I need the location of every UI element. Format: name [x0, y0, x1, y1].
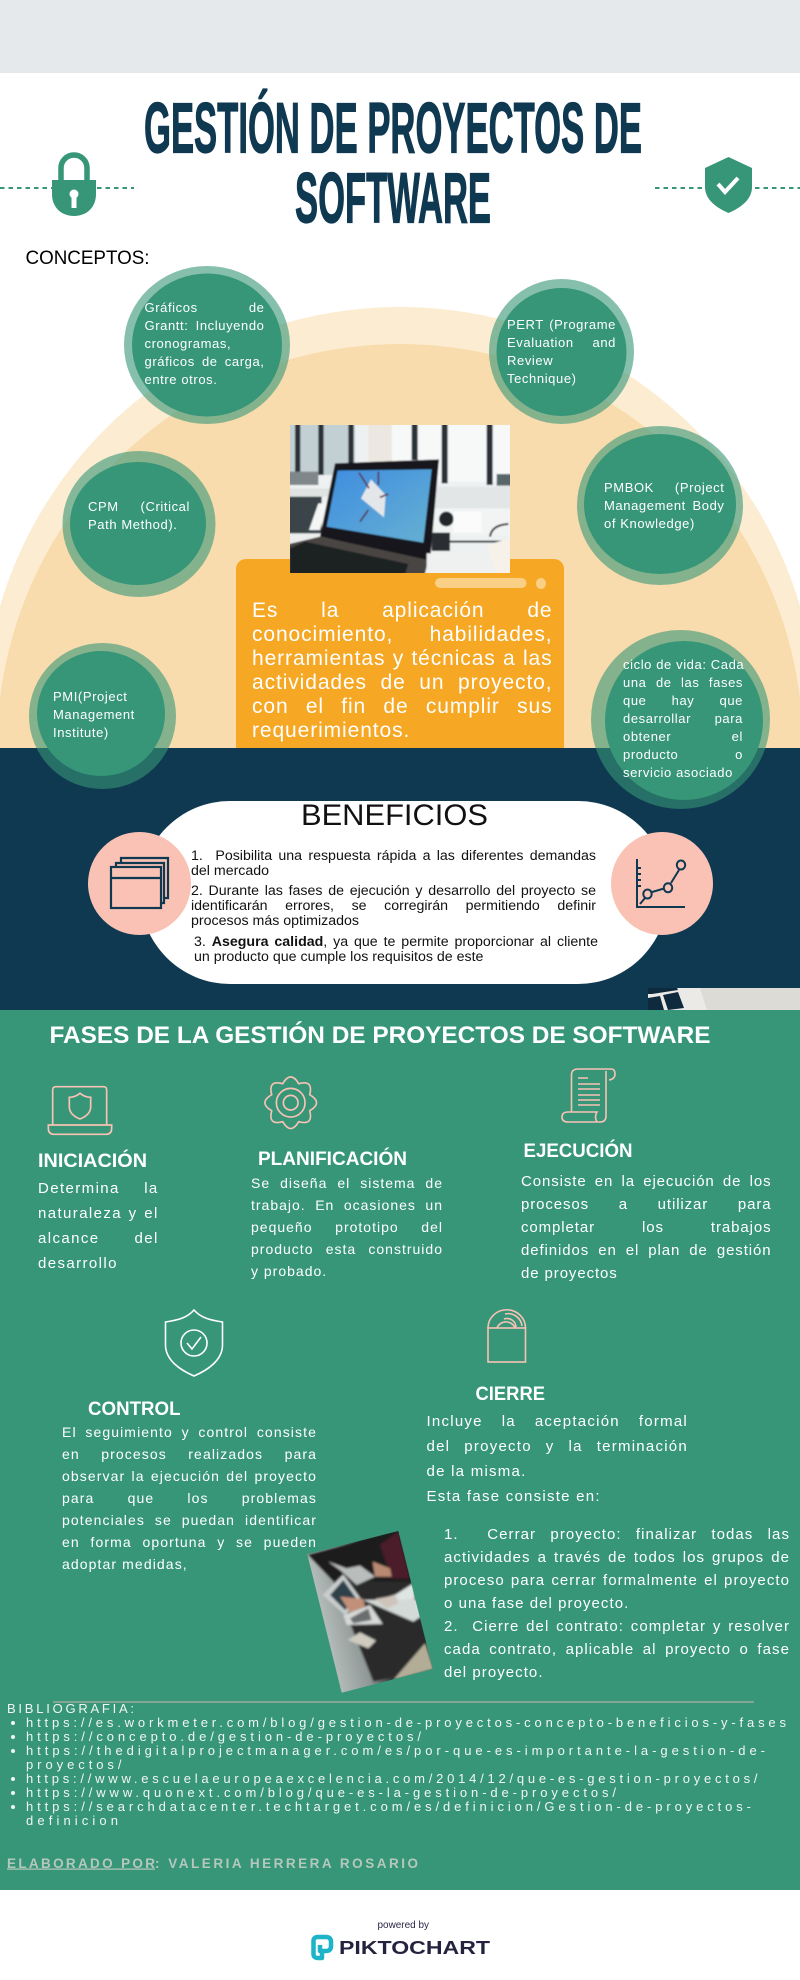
text: ciclo de vida: producto o — [623, 747, 743, 762]
text: bibliografia: https://www.escuelaeuropeaexcelencia.com/2014/12/que-es-gestion-proyectos/ — [26, 1771, 758, 1786]
heading: control: CONTROL — [88, 1399, 181, 1420]
text: cierre intro — [426, 1412, 688, 1504]
text: cierre list: actividades a través de todos los grupos de — [444, 1548, 790, 1566]
text: beneficio 2: procesos más optimizados — [191, 912, 359, 928]
text: ejecucion: de proyectos — [521, 1264, 618, 1282]
text: beneficio 2 — [191, 882, 596, 928]
text: beneficio 2: 2. Durante las fases de ejecución y desarrollo del proyecto se — [191, 882, 596, 898]
text: cierre intro: del proyecto y la terminación — [426, 1438, 688, 1454]
text: ciclo de vida: servicio asociado — [623, 765, 733, 780]
text: beneficio 1: del mercado — [191, 862, 269, 878]
text: elaborado por — [7, 1856, 418, 1871]
text: CPM: Path Method). — [88, 517, 177, 532]
text: definition — [252, 598, 552, 742]
divider — [53, 1701, 754, 1703]
text: planificacion: pequeño prototipo del — [251, 1219, 443, 1235]
title: SOFTWARE — [295, 158, 491, 238]
text: definition: herramientas y técnicas a las — [252, 646, 552, 670]
icon: stacked cards — [88, 832, 191, 935]
heading: fases: FASES DE LA GESTIÓN DE PROYECTOS DE SOFTWARE — [50, 1021, 710, 1049]
text: control: El seguimiento y control consiste — [62, 1424, 317, 1440]
icon: piktochart logo — [314, 1937, 331, 1958]
text: control: para que los problemas — [62, 1490, 317, 1506]
text: CPM: CPM (Critical — [88, 499, 190, 514]
heading: iniciacion: INICIACIÓN — [38, 1150, 147, 1172]
text: control: observar la ejecución del proyecto — [62, 1468, 317, 1484]
text: CPM — [88, 499, 190, 532]
heading: conceptos: CONCEPTOS: — [26, 247, 150, 269]
text: elaborado por: : VALERIA HERRERA ROSARIO — [155, 1856, 418, 1871]
text: ciclo de vida: una de las fases — [623, 675, 743, 690]
text: cierre list: o una fase del proyecto. — [444, 1594, 629, 1612]
text: graficos de Grantt: cronogramas, — [144, 336, 231, 351]
icon: scroll — [562, 1069, 615, 1122]
text: graficos de Grantt: gráficos de carga, — [144, 354, 264, 369]
text: ejecucion: completar los trabajos — [521, 1218, 772, 1236]
text: definition: requerimientos. — [252, 718, 410, 742]
text: PMI: PMI(Project — [53, 688, 128, 704]
text: bibliografia: https://concepto.de/gestion-de-proyectos/ — [26, 1729, 421, 1744]
text: iniciacion: naturaleza y el — [38, 1204, 159, 1222]
text: piktochart wordmark: PIKTOCHART — [339, 1938, 490, 1958]
text: PMBOK: of Knowledge) — [604, 516, 695, 531]
circle: PMBOK — [577, 426, 743, 585]
text: beneficio 2: identificarán errores, se corregirán permitiendo definir — [191, 898, 596, 914]
icon: shield with check and dashed line — [655, 157, 800, 213]
text: iniciacion: alcance del — [38, 1230, 159, 1246]
text: PMI: Management — [53, 706, 135, 722]
image fragment: keyboard corner — [648, 988, 800, 1010]
text: ejecucion: definidos en el plan de gestión — [521, 1242, 772, 1258]
text: bibliografia: BIBLIOGRAFIA: — [7, 1701, 134, 1716]
icon: line chart — [611, 832, 713, 935]
text: definition: Es la aplicación de — [252, 598, 552, 622]
panel: header — [0, 0, 800, 269]
text: beneficio 3: un producto que cumple los requisitos de este — [194, 948, 483, 964]
text: beneficio 1 — [191, 848, 596, 878]
text: planificacion — [251, 1175, 443, 1279]
background arcs — [0, 307, 800, 748]
text: PERT: Review — [507, 353, 553, 368]
icon: bag with arcs — [488, 1310, 526, 1362]
text: bibliografia: https://www.quonext.com/blog/que-es-la-gestion-de-proyectos/ — [26, 1785, 616, 1800]
text: control: en procesos realizados para — [62, 1446, 317, 1462]
text: cierre intro: Incluye la aceptación formal — [426, 1412, 688, 1430]
text: ejecucion: procesos a utilizar para — [521, 1196, 772, 1212]
text: cierre list: cada contrato, aplicable al proyecto o fase — [444, 1640, 790, 1658]
text: beneficio 3: 3. Asegura calidad, ya que te permite proporcionar al cliente — [194, 934, 598, 950]
card: definition — [236, 559, 564, 748]
text: beneficio 3 — [194, 934, 598, 964]
text: control: adoptar medidas, — [62, 1556, 188, 1572]
text: iniciacion — [38, 1180, 159, 1272]
icon: laptop with shield — [48, 1087, 112, 1134]
text: definition: conocimiento, habilidades, — [252, 622, 552, 646]
circle: PMI — [29, 643, 176, 789]
text: ciclo de vida: desarrollar para — [623, 711, 743, 726]
text: planificacion: trabajo. En ocasiones un — [251, 1197, 443, 1213]
heading: cierre: CIERRE — [476, 1384, 545, 1405]
text: cierre list — [444, 1526, 790, 1680]
text: control: en forma oportuna y se pueden — [62, 1534, 317, 1550]
image: laptop on desk — [290, 425, 510, 573]
circle: CPM — [62, 451, 216, 597]
circle: PERT — [489, 279, 634, 424]
text: graficos de Grantt: Grantt: Incluyendo — [144, 318, 264, 333]
icon: padlock with dashed line — [0, 155, 134, 216]
text: ciclo de vida: ciclo de vida: Cada — [623, 657, 744, 672]
panel: beneficios band — [0, 748, 800, 1010]
text: PERT — [507, 317, 616, 386]
text: bibliografia: https://searchdatacenter.techtarget.com/es/definicion/Gestion-de-proyectos- — [26, 1799, 751, 1814]
text: PMBOK: Management Body — [604, 498, 724, 513]
text: definition: con el fin de cumplir sus — [252, 694, 552, 718]
text: iniciacion: desarrollo — [38, 1254, 118, 1272]
text: bibliografia: https://es.workmeter.com/blog/gestion-de-proyectos-concepto-beneficios-y-fases — [26, 1715, 786, 1730]
text: PMI — [53, 688, 135, 740]
text: ejecucion: Consiste en la ejecución de los — [521, 1172, 772, 1190]
text: iniciacion: Determina la — [38, 1180, 159, 1196]
text: PERT: Technique) — [507, 371, 577, 386]
text: ciclo de vida: obtener el — [623, 729, 743, 744]
text: cierre list: proceso para cerrar formalmente el proyecto — [444, 1572, 790, 1588]
text: bibliografia — [7, 1701, 786, 1828]
text: bibliografia: proyectos/ — [26, 1757, 122, 1772]
icon: gear — [265, 1077, 317, 1129]
text: control: potenciales se puedan identificar — [62, 1512, 317, 1528]
text: bibliografia: https://thedigitalprojectmanager.com/es/por-que-es-importante-la-gestion-de- — [26, 1743, 765, 1758]
text: PERT: Evaluation and — [507, 335, 616, 350]
text: cierre intro: de la misma. — [426, 1462, 527, 1480]
text: elaborado por: ELABORADO POR — [7, 1856, 155, 1871]
white pill — [140, 801, 668, 984]
text: bibliografia: definicion — [26, 1813, 118, 1828]
circle: ciclo de vida — [591, 630, 770, 809]
text: cierre list: 1. Cerrar proyecto: finalizar todas las — [444, 1526, 790, 1542]
text: planificacion: y probado. — [251, 1263, 327, 1279]
panel: footer — [311, 1919, 490, 1960]
text: PERT: PERT (Programe — [507, 317, 616, 332]
top grey band — [0, 0, 800, 73]
text: definition: actividades de un proyecto, — [252, 670, 552, 694]
text: graficos de Grantt: Gráficos de — [144, 300, 264, 315]
title — [144, 88, 642, 238]
heading: planificacion: PLANIFICACIÓN — [258, 1148, 407, 1170]
text: cierre list: 2. Cierre del contrato: completar y resolver — [444, 1618, 790, 1634]
text: ciclo de vida — [623, 657, 744, 780]
image: meeting with laptop — [307, 1531, 433, 1693]
text: graficos de Grantt: entre otros. — [144, 372, 217, 387]
text: ciclo de vida: que hay que — [623, 693, 743, 708]
text: graficos de Grantt — [144, 300, 264, 387]
text: cierre intro: Esta fase consiste en: — [426, 1488, 601, 1504]
text: planificacion: Se diseña el sistema de — [251, 1175, 443, 1191]
text: planificacion: producto esta construido — [251, 1241, 443, 1257]
text: PMBOK: PMBOK (Project — [604, 480, 724, 495]
text: powered by: powered by — [378, 1919, 430, 1931]
panel: fases — [0, 1010, 800, 1890]
circle: graficos de Grantt — [124, 266, 290, 424]
text: beneficio 1: 1. Posibilita una respuesta rápida a las diferentes demandas — [191, 848, 596, 864]
heading: ejecucion: EJECUCIÓN — [524, 1140, 632, 1162]
panel: conceptos — [0, 266, 800, 809]
text: PMBOK — [604, 480, 724, 531]
icon: shield with check — [166, 1310, 222, 1376]
heading: beneficios: BENEFICIOS — [301, 799, 488, 832]
text: ejecucion — [521, 1172, 772, 1282]
text: cierre list: del proyecto. — [444, 1664, 544, 1680]
text: control — [62, 1424, 317, 1572]
text: PMI: Institute) — [53, 724, 109, 740]
